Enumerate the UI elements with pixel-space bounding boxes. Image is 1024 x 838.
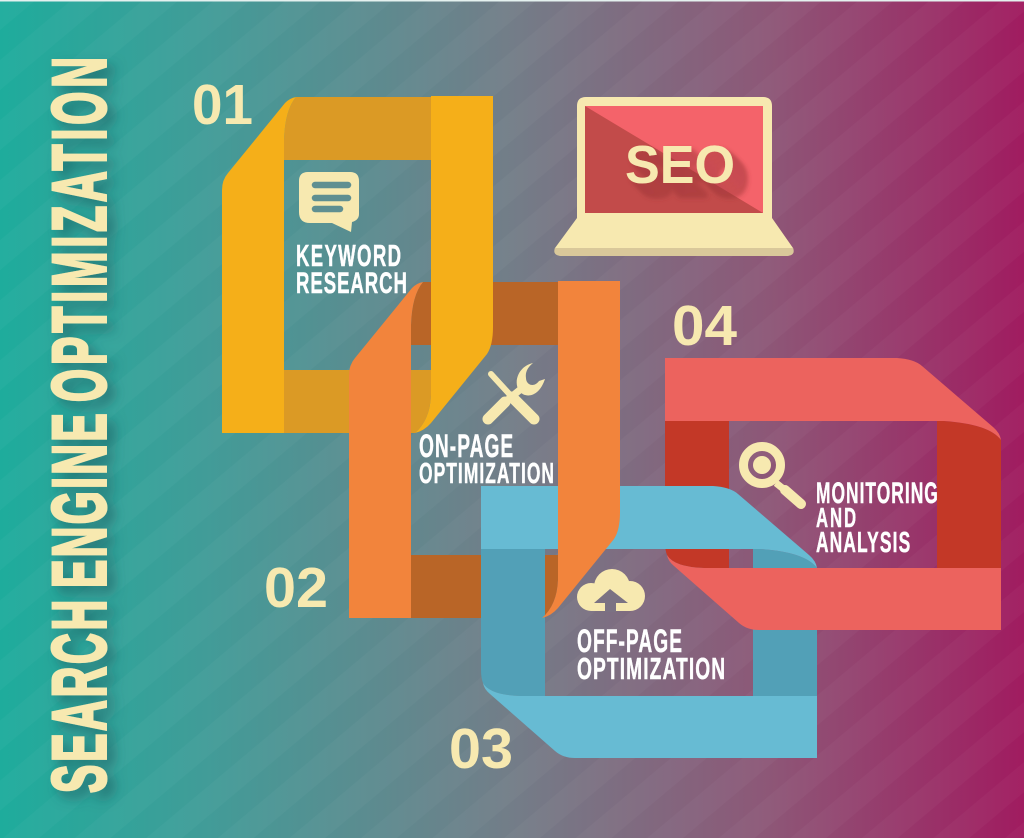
red ribbon: top band [665, 358, 1001, 440]
orange ribbon: dark top band [411, 282, 558, 345]
label: off-page optimization [577, 623, 725, 686]
title: search engine optimization: SEARCH [38, 600, 123, 793]
icon: magnifying glass [744, 446, 801, 504]
label: off-page optimization: OFF-PAGE [577, 623, 682, 659]
orange ribbon: right fold [542, 281, 620, 618]
icon: chat bubble [299, 172, 359, 232]
number 04: 04 [672, 294, 737, 358]
title: search engine optimization: ENGINE [38, 413, 123, 588]
title: search engine optimization: OPTIMIZATION [38, 57, 123, 402]
red ribbon: bottom band [667, 555, 1001, 630]
number 01: 01 [192, 73, 253, 137]
label: monitoring and analysis: MONITORING [816, 477, 938, 510]
blue ribbon: dark right band [753, 549, 817, 696]
yellow ribbon: left fold [222, 97, 296, 433]
label: monitoring and analysis: AND [816, 502, 856, 533]
label: on-page optimization: ON-PAGE [419, 428, 513, 464]
orange ribbon: dark bottom band [411, 555, 558, 618]
label: on-page optimization [419, 428, 554, 490]
blue ribbon: dark left band [481, 549, 545, 696]
title: search engine optimization [38, 57, 123, 793]
label: keyword research: KEYWORD [296, 239, 401, 273]
icon: cloud upload [577, 569, 645, 612]
label: monitoring and analysis: ANALYSIS [816, 527, 910, 559]
number 03: 03 [449, 717, 513, 781]
number 02: 02 [264, 556, 328, 620]
blue ribbon: top band [481, 486, 817, 568]
label: off-page optimization: OPTIMIZATION [577, 653, 725, 686]
yellow ribbon: dark bottom band [284, 370, 431, 433]
label: keyword research [296, 239, 407, 300]
label: on-page optimization: OPTIMIZATION [419, 458, 554, 490]
label: keyword research: RESEARCH [296, 267, 407, 300]
icon: laptop with SEO [554, 97, 794, 256]
blue ribbon: bottom band [483, 683, 817, 758]
yellow ribbon: dark top band [284, 97, 431, 160]
red ribbon: dark side bands [665, 421, 1001, 568]
yellow ribbon: right fold [415, 96, 493, 433]
orange ribbon: left fold [349, 282, 423, 618]
label: monitoring and analysis [816, 477, 938, 559]
icon: laptop with SEO: SEO [625, 135, 735, 195]
icon: tools [488, 363, 545, 419]
